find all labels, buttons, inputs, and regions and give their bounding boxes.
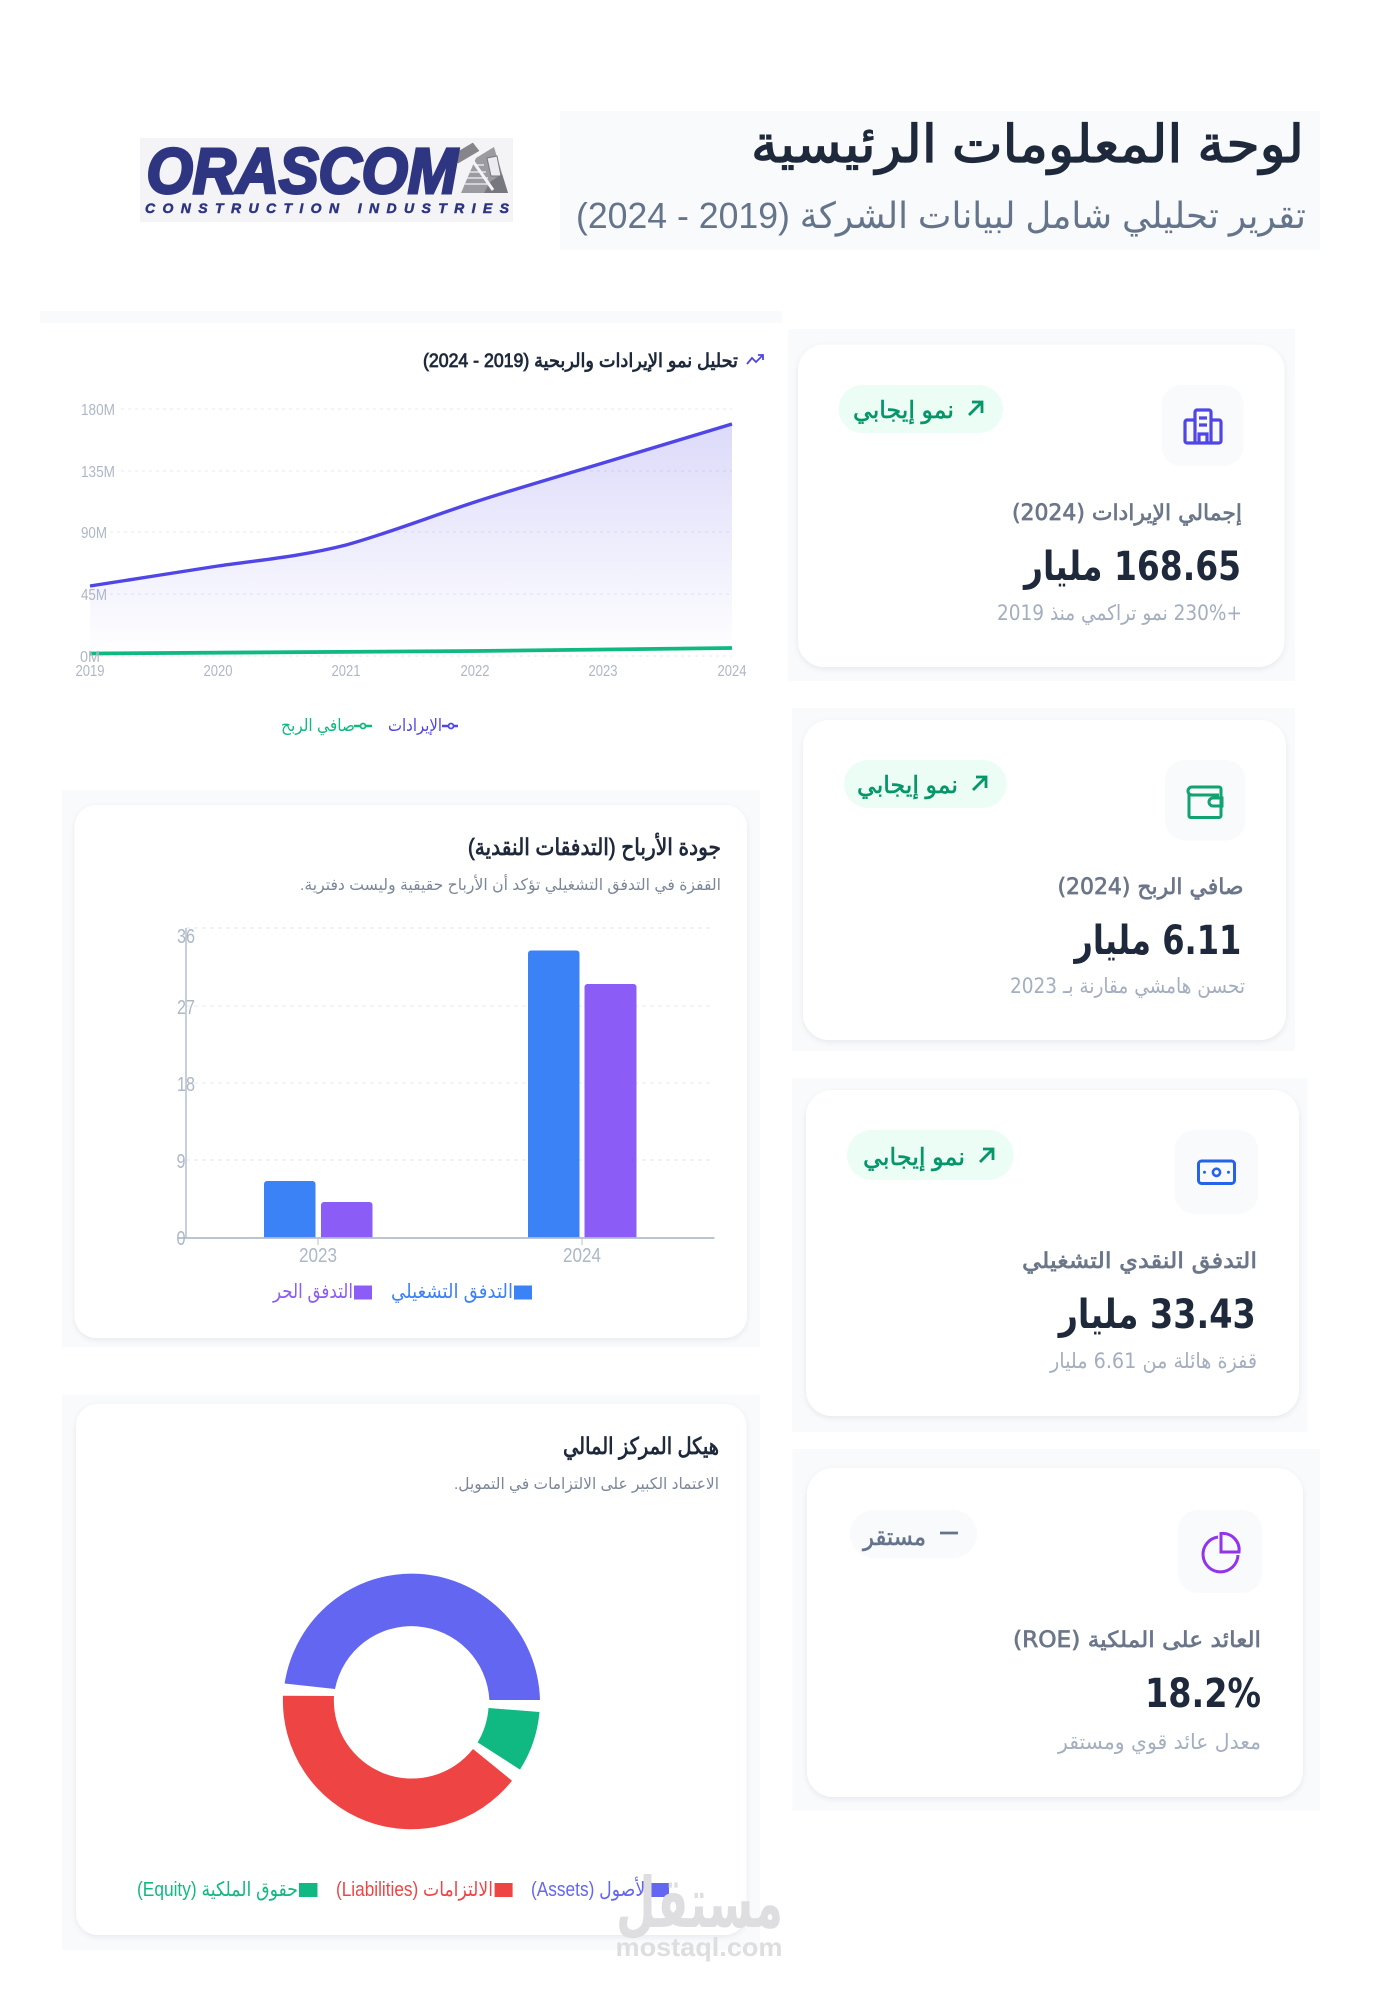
watermark: [616, 1864, 783, 1962]
legend: [281, 716, 458, 736]
donut: equity: [478, 1708, 540, 1770]
y axis labels: 180M: [81, 402, 115, 419]
donut: liabilities: [283, 1696, 512, 1829]
icon box: [1165, 760, 1246, 840]
panel: earnings quality bar chart: [62, 790, 760, 1347]
logo emblem: [451, 142, 508, 193]
panel: financial position donut chart: [62, 1394, 760, 1950]
chart description: الاعتماد الكبير على الالتزامات في التمويل.: [454, 1476, 719, 1494]
x axis labels: [299, 1245, 601, 1267]
x axis labels: 2022: [460, 663, 490, 680]
company logo: ORASCOM: [146, 135, 459, 207]
watermark: mostaql.com: [616, 1932, 782, 1962]
label: إجمالي الإيرادات (2024): [1012, 501, 1242, 526]
icon box: [1178, 1510, 1262, 1593]
x axis labels: 2023: [299, 1245, 337, 1267]
icon: arrow up right: [980, 1149, 993, 1162]
KPI card: operating cash flow: [792, 1078, 1308, 1432]
subtitle: تقرير تحليلي شامل لبيانات الشركة (2019 - 2024): [576, 195, 1306, 237]
chart description: القفزة في التدفق التشغيلي تؤكد أن الأرباح حقيقية وليست دفترية.: [300, 874, 721, 895]
note: +230% نمو تراكمي منذ 2019: [997, 601, 1242, 625]
y axis labels: 36: [177, 926, 195, 948]
legend: [137, 1877, 669, 1901]
y axis labels: [176, 926, 195, 1250]
x axis labels: 2024: [718, 663, 747, 680]
x axis labels: 2021: [332, 663, 361, 680]
legend: [272, 1281, 532, 1304]
KPI card: total revenue: [788, 329, 1295, 681]
KPI card: operating cash flow: نمو إيجابي: [863, 1144, 965, 1172]
x axis labels: [76, 663, 747, 680]
bars: [264, 950, 636, 1238]
icon: arrow up right: [973, 777, 986, 790]
KPI card: return on equity: مستقر: [862, 1524, 926, 1551]
x axis labels: 2019: [76, 663, 105, 680]
legend: التدفق الحر: [272, 1281, 353, 1303]
note: معدل عائد قوي ومستقر: [1057, 1730, 1261, 1754]
icon box: [1162, 385, 1244, 466]
y axis labels: 0M: [80, 649, 100, 666]
icon: arrow up right: [969, 402, 982, 415]
line net profit: [90, 648, 732, 654]
y axis labels: 0: [176, 1228, 186, 1250]
donut: assets: [285, 1574, 540, 1700]
icon: dash: [940, 1532, 958, 1534]
note: قفزة هائلة من 6.61 مليار: [1049, 1349, 1257, 1373]
KPI card: net profit: نمو إيجابي: [857, 772, 958, 800]
KPI card: return on equity: [792, 1449, 1320, 1810]
icon: building: [1185, 410, 1221, 443]
y axis labels: 9: [176, 1151, 186, 1173]
area chart revenue: [90, 424, 732, 656]
growth pill: [838, 385, 1003, 433]
icon: banknote: [1198, 1161, 1234, 1184]
chart heading: جودة الأرباح (التدفقات النقدية): [468, 833, 721, 861]
x axis labels: 2023: [588, 663, 618, 680]
KPI card: net profit: [792, 708, 1295, 1051]
company logo: CONSTRUCTION INDUSTRIES: [145, 200, 510, 216]
legend: الالتزامات (Liabilities): [336, 1879, 493, 1901]
label: صافي الربح (2024): [1058, 875, 1244, 900]
stable pill: [850, 1510, 977, 1558]
growth pill: [847, 1130, 1014, 1180]
value: 33.43 مليار: [1057, 1292, 1256, 1338]
growth pill: [844, 760, 1007, 808]
y axis labels: 18: [177, 1074, 195, 1096]
y axis labels: 90M: [81, 525, 107, 542]
icon: pie chart: [1203, 1533, 1239, 1572]
chart heading: هيكل المركز المالي: [563, 1433, 719, 1460]
y axis labels: 45M: [81, 587, 107, 604]
header banner: [560, 111, 1320, 250]
legend: الإيرادات: [388, 716, 442, 735]
x axis labels: 2020: [204, 663, 233, 680]
legend: التدفق التشغيلي: [391, 1281, 513, 1304]
y axis labels: 135M: [81, 464, 115, 481]
icon: wallet: [1188, 787, 1222, 818]
value: 168.65 مليار: [1022, 544, 1241, 590]
legend: الأصول (Assets): [531, 1877, 650, 1901]
KPI card: total revenue: نمو إيجابي: [853, 397, 954, 425]
value: 6.11 مليار: [1073, 918, 1241, 964]
value: 18.2%: [1145, 1671, 1261, 1717]
icon: trending up: [747, 355, 763, 364]
x axis labels: 2024: [563, 1245, 601, 1267]
chart heading: تحليل نمو الإيرادات والربحية (2019 - 2024): [423, 351, 738, 372]
panel: revenue and profit growth chart: [40, 311, 782, 736]
icon box: [1175, 1130, 1258, 1214]
title: لوحة المعلومات الرئيسية: [751, 116, 1304, 175]
note: تحسن هامشي مقارنة بـ 2023: [1010, 974, 1245, 998]
watermark: مستقل: [616, 1864, 783, 1942]
label: العائد على الملكية (ROE): [1013, 1628, 1261, 1653]
label: التدفق النقدي التشغيلي: [1022, 1249, 1257, 1274]
legend: حقوق الملكية (Equity): [137, 1879, 298, 1901]
legend: صافي الربح: [281, 716, 355, 736]
y axis labels: [80, 402, 115, 666]
y axis labels: 27: [177, 997, 195, 1019]
